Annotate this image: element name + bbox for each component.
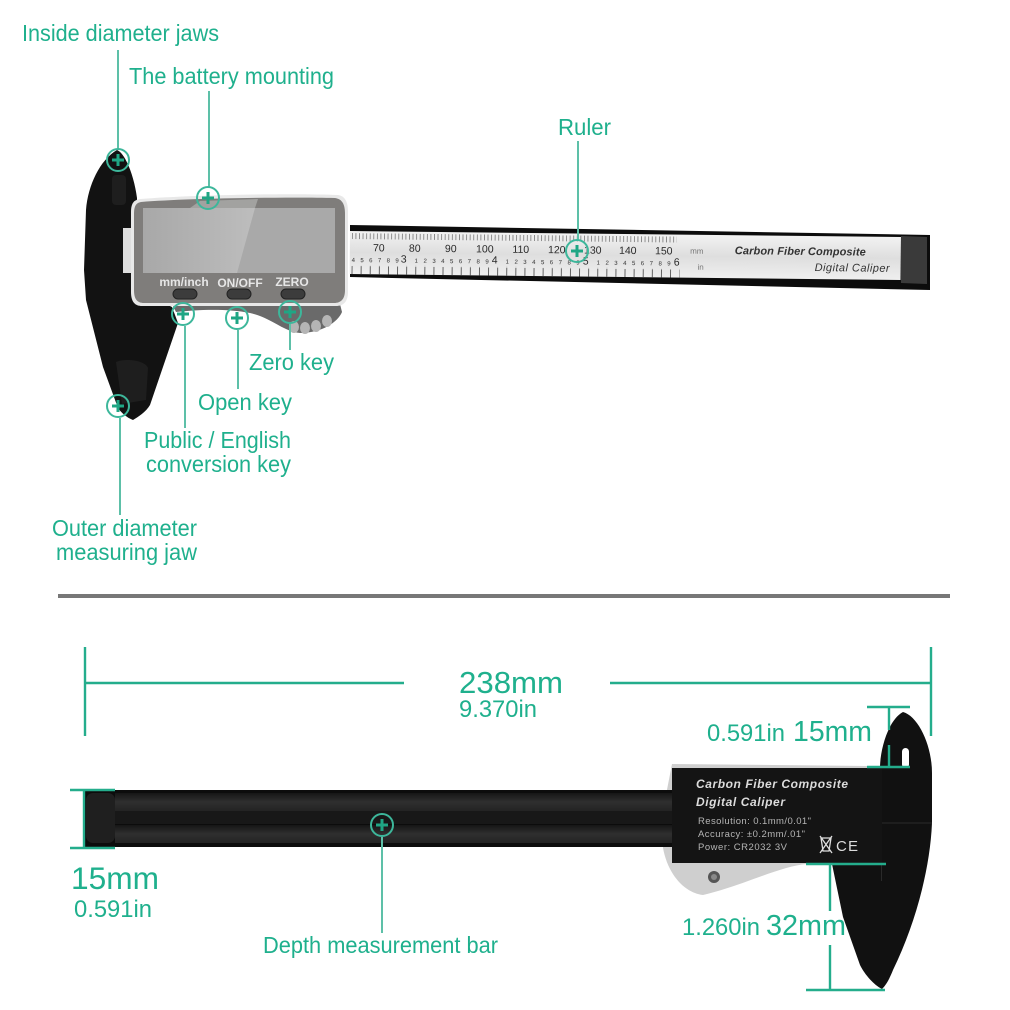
plate text	[696, 777, 858, 855]
callout: depth measurement bar	[263, 814, 498, 958]
icon: LCD screen	[143, 208, 335, 273]
ruler scale: 130	[584, 245, 602, 257]
icon: jaw recesses	[112, 175, 148, 404]
ruler scale: in	[697, 263, 704, 272]
icon: depth bar	[84, 790, 674, 847]
callout: public / english conversion key	[144, 303, 291, 477]
plate text: Resolution: 0.1mm/0.01"	[698, 816, 811, 827]
icon: jaw slot	[902, 748, 909, 768]
ruler scale: 70	[373, 242, 385, 254]
icon: thumb wheel housing	[172, 304, 342, 333]
dimension: inner jaw 15mm: 15mm	[793, 716, 872, 748]
icon: thumb wheel bumps	[289, 315, 332, 334]
callout: open key: Open key	[198, 389, 292, 415]
ruler scale: 150	[655, 245, 673, 257]
icon: recycling bin mark	[820, 836, 832, 853]
ruler scale: 4 5 6 7 8 9	[352, 258, 399, 265]
icon: housing rivet	[708, 871, 720, 883]
button labels: ON/OFF	[217, 276, 263, 290]
dimension: bar width 15mm	[70, 790, 159, 923]
ruler scale: 6	[674, 257, 680, 269]
ruler scale: 5	[583, 256, 589, 268]
ruler end block	[901, 236, 927, 284]
callout: outer diameter measuring jaw	[52, 395, 197, 565]
button labels: mm/inch	[159, 275, 209, 289]
callout: open key	[198, 307, 292, 415]
icon: back jaw	[832, 712, 932, 989]
callout: outer diameter measuring jaw: Outer diameter	[52, 515, 197, 541]
ruler scale	[350, 231, 901, 280]
ruler scale: 3	[401, 254, 407, 266]
dimension: overall length 238mm	[85, 647, 931, 736]
ruler scale: Carbon Fiber Composite	[735, 245, 866, 259]
callout: outer diameter measuring jaw: measuring jaw	[56, 539, 197, 565]
callout: inside diameter jaws	[22, 20, 219, 171]
button labels	[159, 275, 309, 290]
callout: ruler	[558, 114, 611, 262]
ruler scale: 140	[619, 245, 637, 257]
ruler scale: 4	[492, 255, 498, 267]
ruler scale: 120	[548, 244, 566, 256]
callout: ruler: Ruler	[558, 114, 611, 140]
plate text: Carbon Fiber Composite	[696, 777, 848, 791]
ruler black frame	[350, 225, 930, 290]
dimension: outer jaw 32mm	[682, 864, 886, 990]
callout: public / english conversion key: conversion key	[146, 451, 291, 477]
icon: caliper jaw	[84, 150, 178, 420]
ruler scale: 90	[445, 243, 457, 255]
icon: silver housing	[663, 764, 868, 895]
panel: caliper front view	[84, 150, 930, 420]
callout: inside diameter jaws: Inside diameter jaws	[22, 20, 219, 46]
icon: display housing	[131, 194, 348, 306]
plate text: Power: CR2032 3V	[698, 842, 788, 853]
dimension: inner jaw 15mm: 0.591in	[707, 720, 785, 747]
ruler scale: 80	[409, 243, 421, 255]
ruler scale: 1 2 3 4 5 6 7 8 9	[506, 260, 580, 266]
dimension: outer jaw 32mm: 1.260in	[682, 914, 760, 941]
icon: LCD glare	[143, 208, 255, 273]
ruler scale: mm	[690, 247, 704, 256]
ruler scale: 1 2 3 4 5 6 7 8 9	[597, 261, 671, 267]
icon: housing highlight	[190, 199, 258, 208]
icon: silver tab	[123, 228, 132, 273]
divider	[58, 594, 950, 598]
icon: jaw step	[882, 823, 932, 881]
ruler scale: 1 2 3 4 5 6 7 8 9	[415, 259, 489, 266]
plate text: CE	[836, 838, 858, 855]
icon: black label plate	[672, 768, 882, 863]
callout: zero key	[249, 301, 334, 375]
callout: zero key: Zero key	[249, 349, 334, 375]
plate text: Digital Caliper	[696, 795, 786, 809]
icon: display face	[134, 198, 345, 303]
ruler scale: Digital Caliper	[815, 262, 891, 275]
dimension: outer jaw 32mm: 32mm	[766, 910, 846, 942]
callout: battery mounting: The battery mounting	[129, 63, 334, 89]
callout: depth measurement bar: Depth measurement bar	[263, 932, 498, 958]
button labels: ZERO	[275, 275, 309, 289]
plate text: Accuracy: ±0.2mm/.01"	[698, 829, 805, 840]
callout: public / english conversion key: Public / English	[144, 427, 291, 453]
callout: battery mounting	[129, 63, 334, 209]
dimension: inner jaw 15mm	[707, 707, 910, 767]
dimension: bar width 15mm: 0.591in	[74, 896, 152, 923]
panel: caliper back view	[84, 712, 932, 989]
ruler scale: 100	[476, 243, 494, 256]
ruler scale: 110	[512, 244, 529, 256]
dimension: bar width 15mm: 15mm	[71, 860, 159, 896]
icon: buttons	[173, 289, 305, 299]
icon: ruler	[350, 225, 930, 290]
dimension: overall length 238mm: 238mm	[459, 665, 563, 700]
dimension: overall length 238mm: 9.370in	[459, 696, 537, 723]
